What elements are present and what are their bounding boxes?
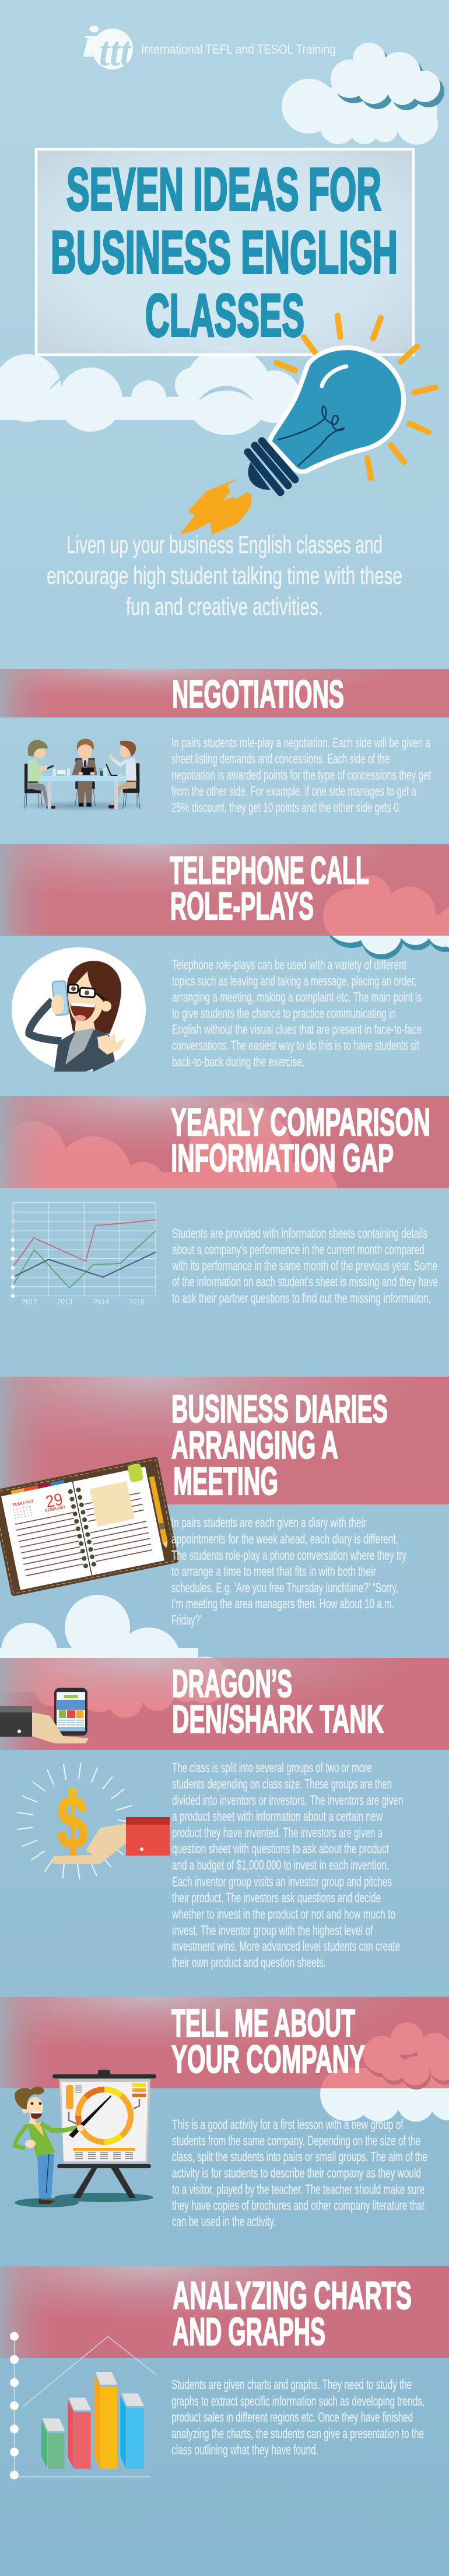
bar chart — [10, 2332, 156, 2479]
bulb filament — [278, 406, 344, 466]
banner — [0, 669, 449, 718]
icon: diary: FEBRUARY — [12, 1498, 34, 1507]
line chart — [10, 1203, 156, 1306]
body text: class outlining what they have found. — [171, 2442, 318, 2457]
body text: can be used in the activity. — [172, 2214, 276, 2229]
green bar — [41, 2418, 65, 2469]
banner — [0, 1997, 449, 2090]
clouds: top right — [282, 43, 444, 145]
panel: telephone call role-plays — [0, 844, 449, 1072]
panel: tell me about your company — [0, 1997, 449, 2229]
banner — [0, 1658, 449, 1750]
body text: Friday?’ — [171, 1612, 202, 1628]
blue bar — [120, 2393, 144, 2469]
heading — [170, 849, 369, 928]
icon: woman on phone — [12, 947, 146, 1072]
icon: light bulb rocket — [180, 316, 436, 535]
intro text: fun and creative activities. — [126, 593, 323, 620]
panel: yearly comparison information gap — [0, 1096, 449, 1306]
donut chart — [78, 2090, 131, 2142]
panel: negotiations — [0, 669, 449, 815]
banner — [0, 2266, 449, 2358]
icon: diary — [0, 1457, 179, 1597]
presenter figure — [15, 2087, 111, 2204]
logo mark: ttt — [99, 28, 132, 75]
panel: analyzing charts and graphs — [0, 2266, 449, 2479]
heading: ARRANGING A — [171, 1423, 338, 1467]
body text: back-to-back during the exercise. — [172, 1054, 304, 1069]
icon: meeting at table — [13, 739, 150, 811]
body text — [172, 957, 422, 1069]
heading: AND GRAPHS — [173, 2310, 325, 2354]
heading — [173, 2274, 412, 2354]
heading — [171, 2001, 365, 2081]
banner — [0, 844, 449, 936]
body text — [171, 1515, 406, 1628]
icon: dollar in hand — [17, 1763, 170, 1879]
yellow bar — [94, 2372, 117, 2469]
icon: hand holding phone — [0, 1688, 89, 1744]
heading: MEETING — [173, 1460, 278, 1503]
intro text — [47, 531, 402, 620]
body text — [171, 2376, 425, 2457]
bulb highlight — [322, 366, 346, 386]
title box — [36, 149, 413, 355]
icon: diary: 29 — [44, 1490, 64, 1512]
bulb rays — [276, 316, 436, 478]
heading — [172, 1662, 384, 1741]
clouds: behind title bottom — [0, 346, 300, 435]
heading — [171, 1387, 388, 1503]
panel: business diaries arranging a meeting — [0, 1377, 449, 1628]
red bar — [68, 2398, 91, 2469]
cloud above banner — [0, 1595, 229, 1718]
logo wordmark: International TEFL and TESOL Training — [141, 42, 336, 57]
logo mark — [82, 18, 133, 75]
line chart: 2015 — [129, 1297, 145, 1306]
title: CLASSES — [145, 282, 304, 349]
line chart: 2014 — [93, 1297, 109, 1306]
rocket flame — [180, 478, 252, 535]
icon: presenter at board — [15, 2070, 156, 2207]
header: logo — [82, 18, 336, 75]
bulb base — [248, 441, 295, 492]
line chart: 2012 — [22, 1297, 37, 1306]
cloud below banner — [323, 876, 449, 960]
banner — [0, 1096, 449, 1188]
cloud below banner — [320, 2067, 449, 2122]
heading — [171, 1100, 430, 1180]
heading: ROLE-PLAYS — [170, 884, 314, 928]
icon: diary: FEBRUARY — [45, 1504, 66, 1513]
panel: dragon's den / shark tank — [0, 1595, 449, 1970]
body text: their own product and question sheets. — [172, 1955, 326, 1970]
icon: dollar in hand: $ — [57, 1780, 88, 1865]
body text — [171, 1760, 404, 1970]
body text — [171, 735, 431, 815]
body text — [172, 2117, 427, 2229]
line chart: 2013 — [57, 1297, 72, 1306]
bulb glass — [270, 348, 404, 472]
body text — [171, 1226, 438, 1306]
title — [51, 156, 398, 349]
heading: DRAGON’S — [172, 1662, 292, 1706]
logo mark: i — [82, 18, 99, 66]
banner — [0, 1377, 449, 1504]
